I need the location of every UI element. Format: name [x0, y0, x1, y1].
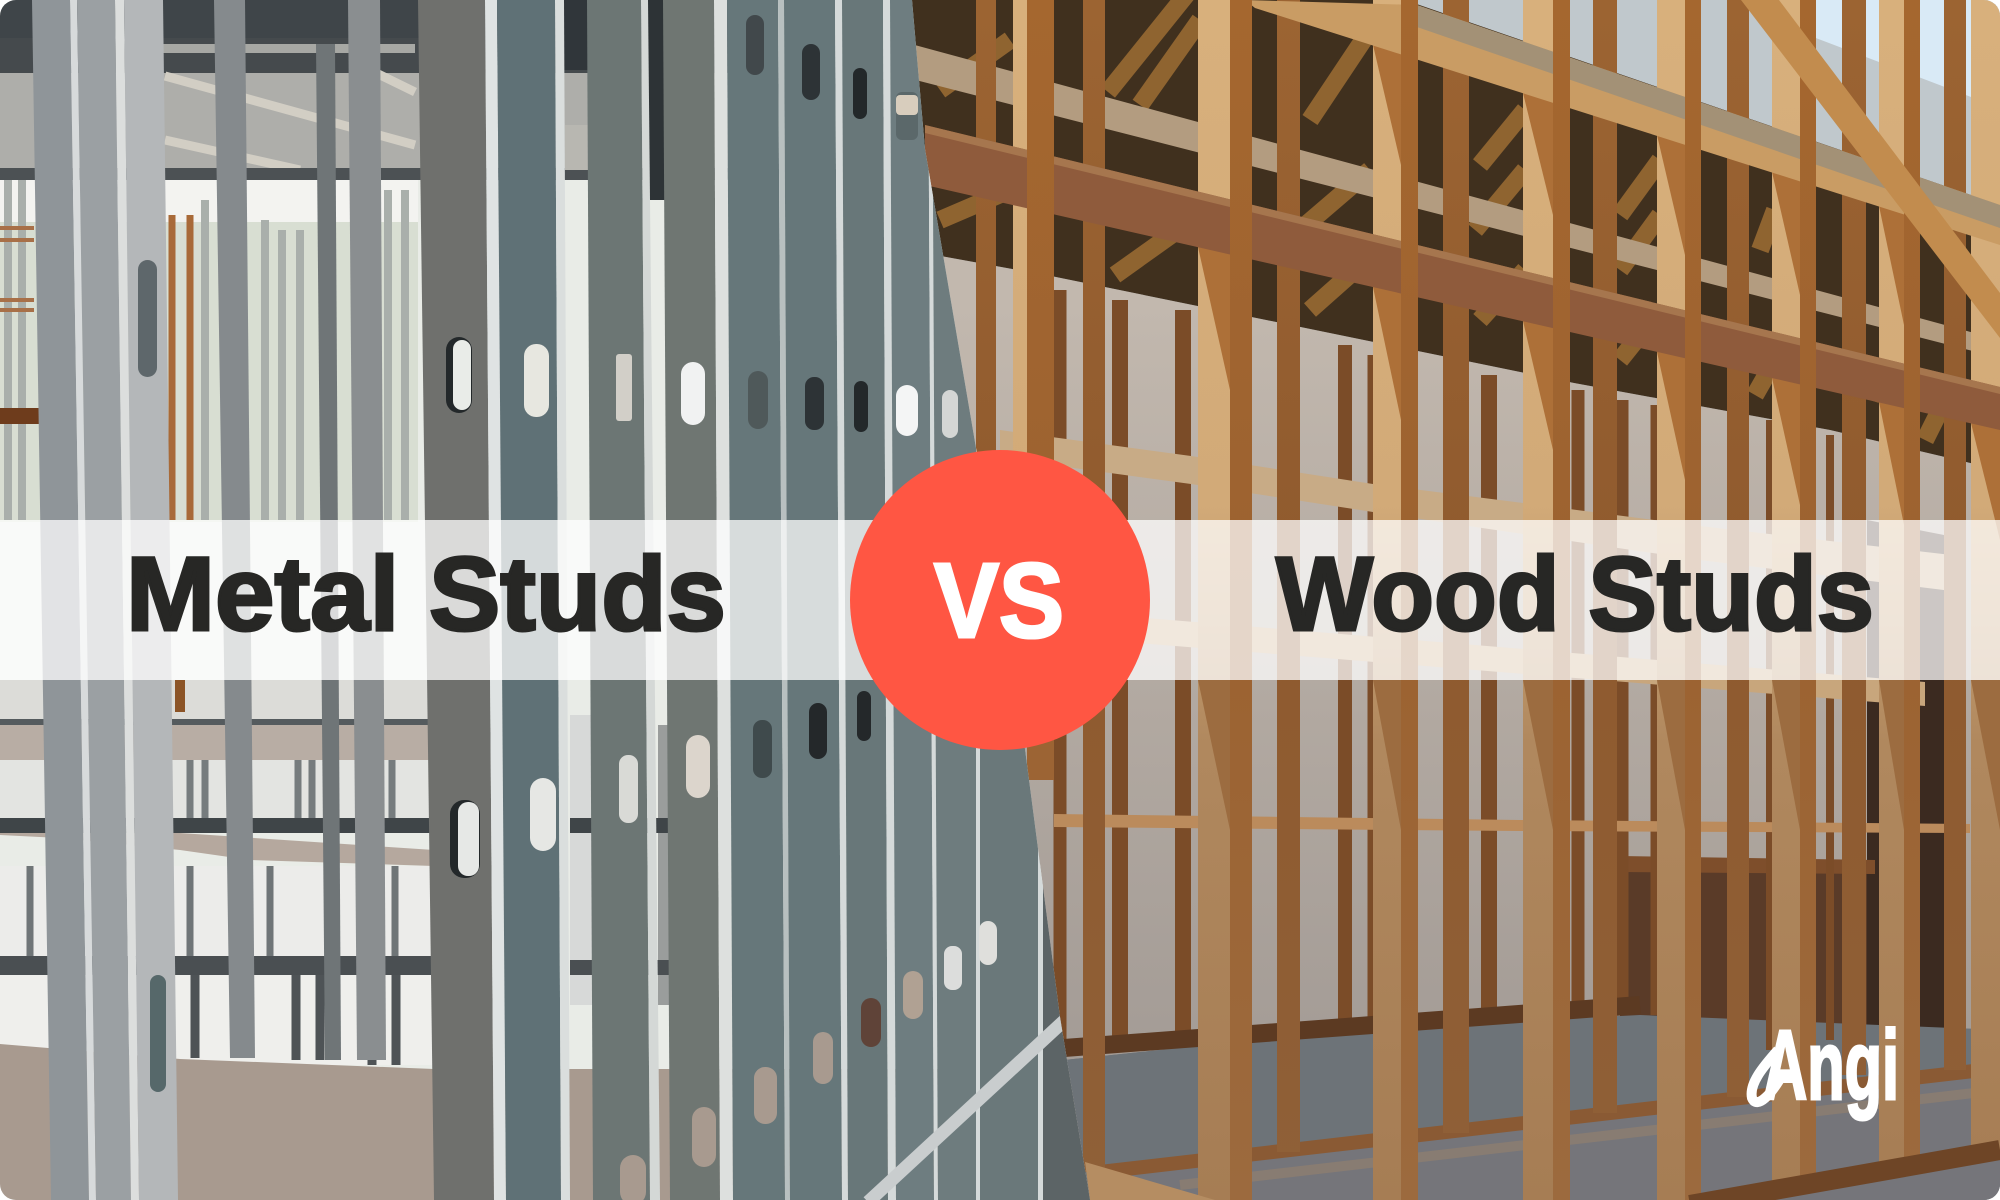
diagonal metal brace: [868, 1019, 1066, 1200]
heading: Metal Studs: Metal Studs: [126, 536, 726, 653]
heading: Wood Studs: Wood Studs: [1276, 536, 1874, 653]
Angi logo: Angi: [1763, 1010, 1899, 1120]
oval slots, lower row: [450, 691, 997, 1200]
oval slots, upper row: [446, 15, 958, 438]
VS badge: [850, 450, 1150, 750]
photo: metal stud framing: [0, 0, 1100, 1200]
Angi logo: [1746, 1026, 1896, 1122]
translucent title banner: [0, 520, 2000, 680]
VS badge: VS: [934, 542, 1064, 660]
metal studs, centre group: [418, 0, 1100, 1200]
photo: wood stud framing: [880, 0, 2000, 1200]
metal stud with oval slots, foreground left: [32, 0, 178, 1200]
